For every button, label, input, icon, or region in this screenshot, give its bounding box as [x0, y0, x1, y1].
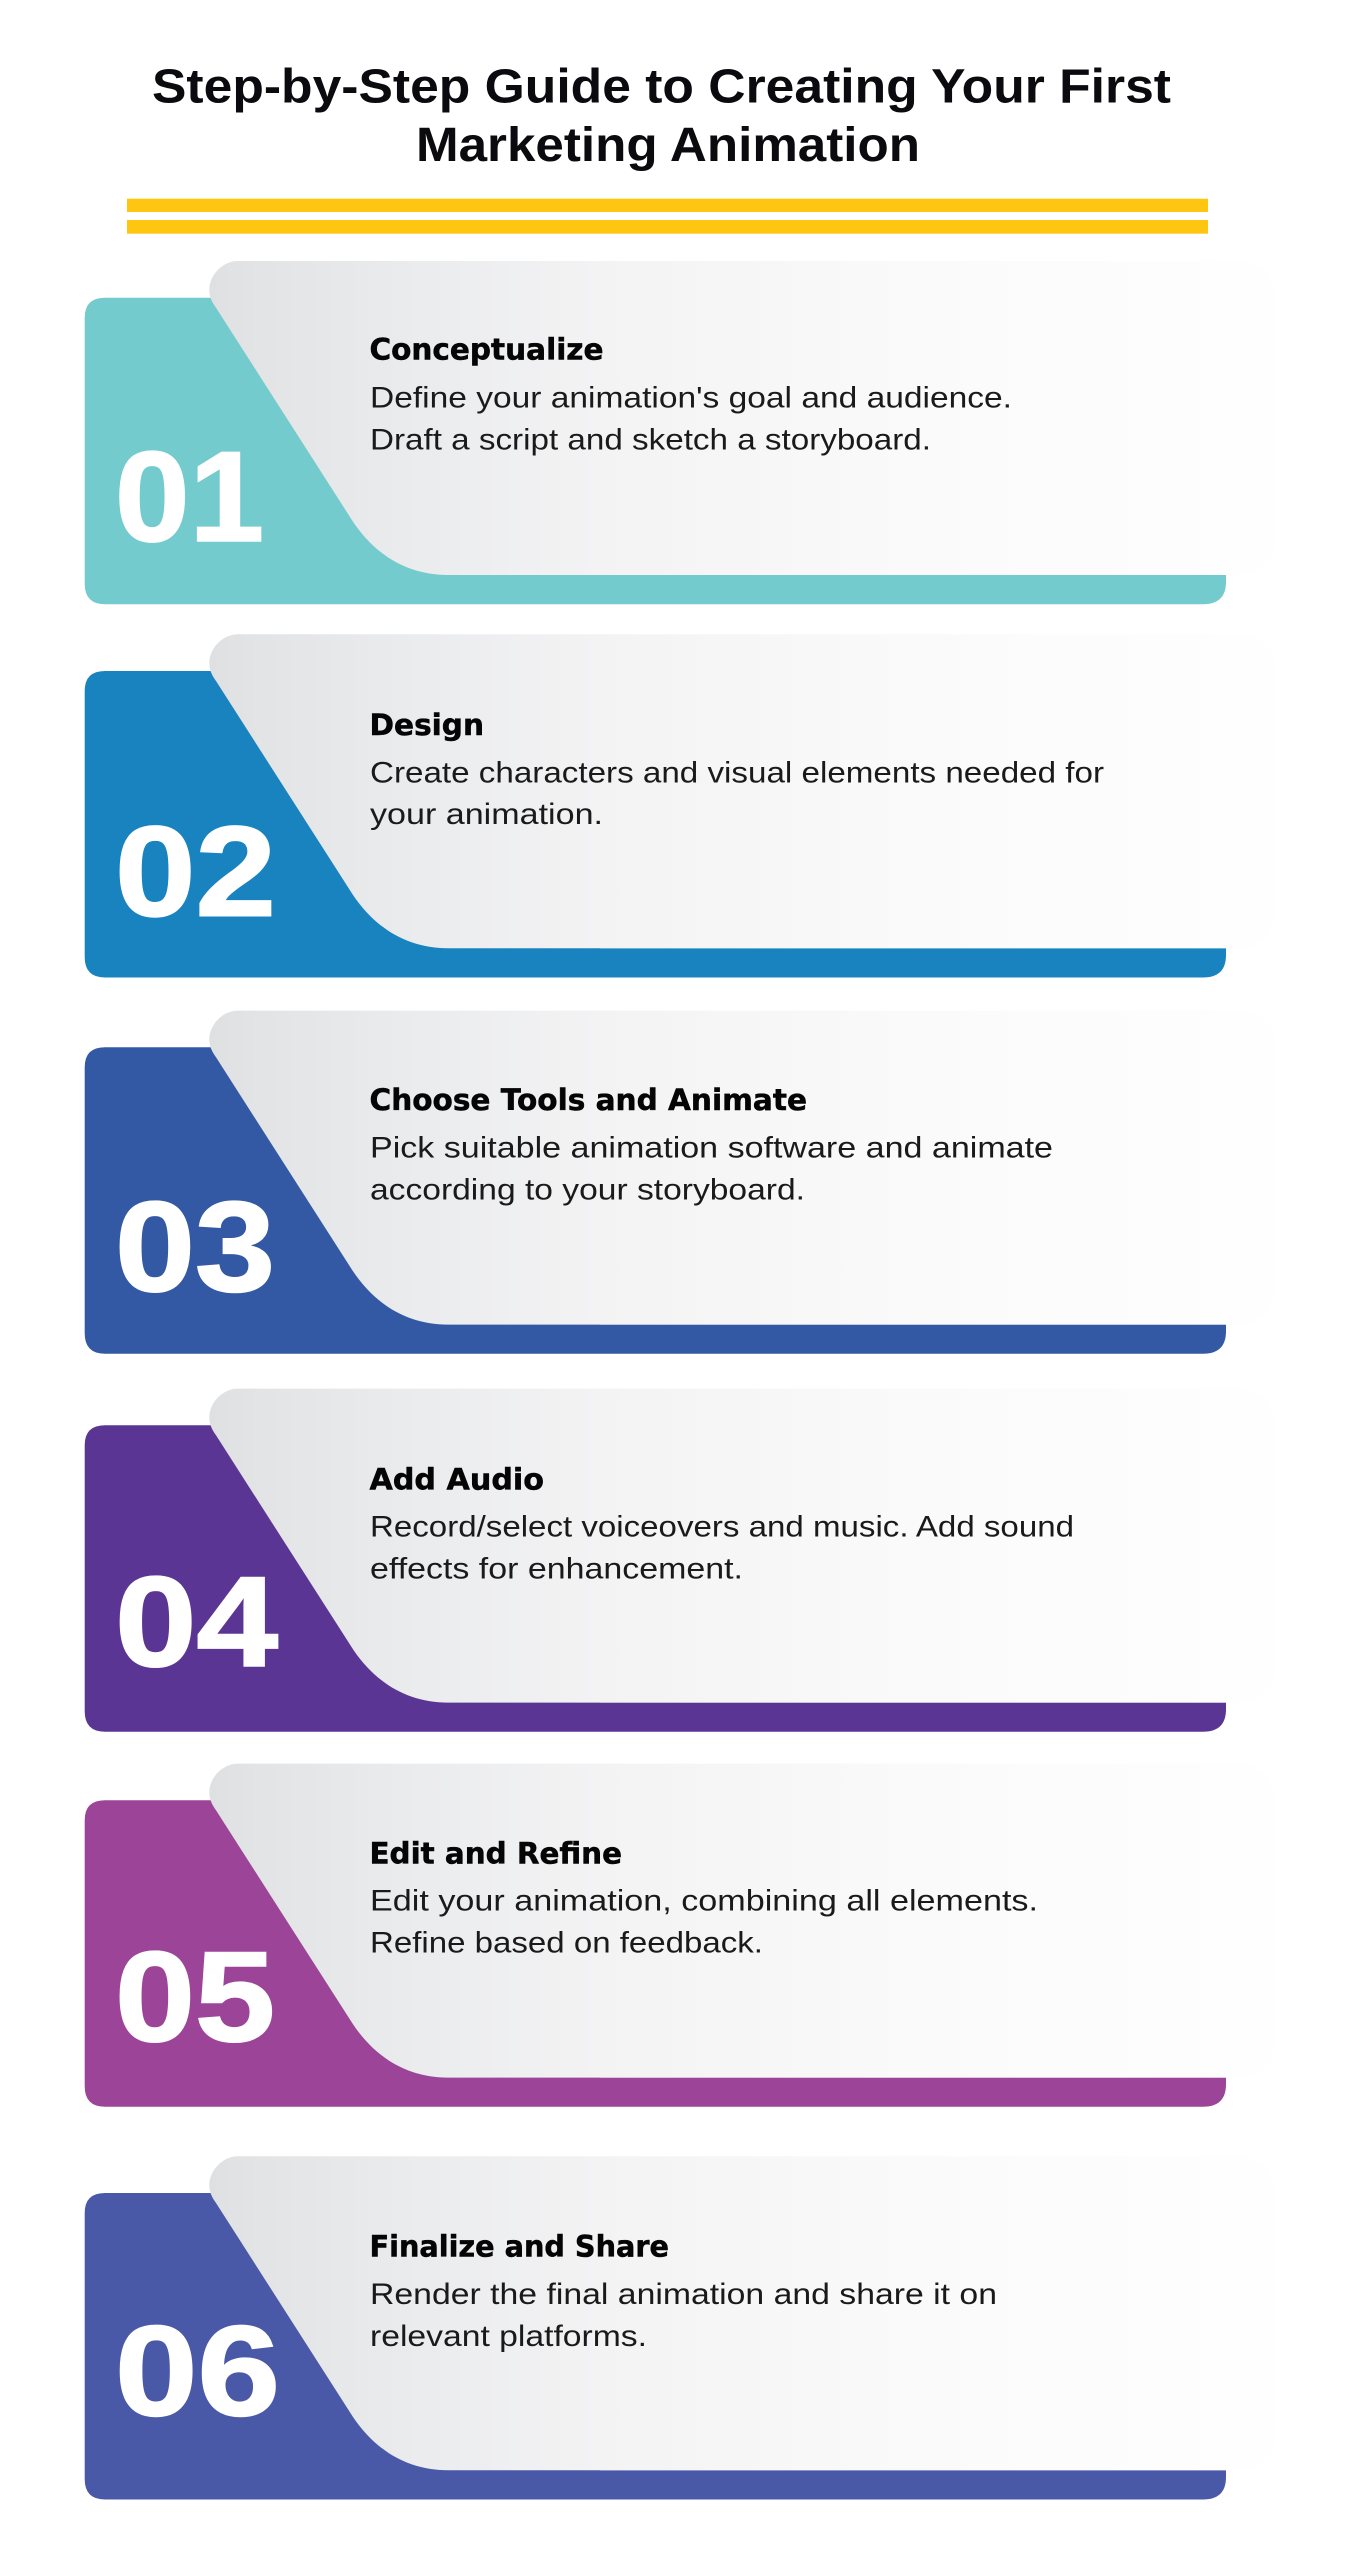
- step description: Record/select voiceovers and music. Add sound: [370, 1511, 1074, 1544]
- title: Marketing Animation: [416, 119, 920, 172]
- step heading: Add Audio: [370, 1462, 544, 1496]
- title: [152, 61, 1171, 172]
- step number: 03: [115, 1176, 275, 1319]
- colored base shape: [85, 1800, 1226, 2107]
- gradient card: [209, 2156, 1275, 2470]
- step heading: Choose Tools and Animate: [370, 1083, 807, 1117]
- step description: [370, 2278, 997, 2353]
- step number: 01: [115, 426, 264, 569]
- panel: step 02 Design: [85, 634, 1275, 978]
- step description: Pick suitable animation software and animate: [370, 1132, 1053, 1165]
- step description: Define your animation's goal and audience.: [370, 382, 1012, 415]
- step heading: Edit and Refine: [370, 1836, 622, 1870]
- step description: your animation.: [370, 798, 603, 831]
- step description: [370, 757, 1104, 831]
- step number: 06: [115, 2300, 280, 2443]
- step heading: Design: [370, 708, 484, 742]
- step heading: Conceptualize: [370, 332, 604, 366]
- colored base shape: [85, 298, 1226, 604]
- step description: [370, 1511, 1074, 1585]
- colored base shape: [85, 1425, 1226, 1732]
- panel: step 06 Finalize and Share: [85, 2156, 1275, 2500]
- step number: 04: [115, 1551, 278, 1694]
- panel: step 03 Choose Tools and Animate: [85, 1011, 1275, 1354]
- gradient card: [209, 1389, 1275, 1703]
- panel: step 01 Conceptualize: [85, 261, 1275, 604]
- colored base shape: [85, 2193, 1226, 2500]
- step description: Edit your animation, combining all elements.: [370, 1885, 1038, 1918]
- gradient card: [209, 261, 1275, 575]
- step description: [370, 1132, 1053, 1206]
- gradient card: [209, 1764, 1275, 2078]
- step heading: Finalize and Share: [370, 2230, 669, 2264]
- step description: [370, 382, 1012, 456]
- step number: 02: [115, 800, 276, 944]
- step description: Render the final animation and share it on: [370, 2278, 997, 2311]
- step number: 05: [115, 1926, 275, 2069]
- step description: [370, 1885, 1038, 1960]
- title: Step-by-Step Guide to Creating Your First: [152, 61, 1171, 114]
- step description: Create characters and visual elements needed for: [370, 757, 1104, 790]
- panel: step 04 Add Audio: [85, 1389, 1275, 1732]
- step description: effects for enhancement.: [370, 1552, 743, 1585]
- step description: according to your storyboard.: [370, 1173, 805, 1206]
- yellow double rule: [127, 199, 1208, 234]
- gradient card: [209, 634, 1275, 948]
- step description: Refine based on feedback.: [370, 1927, 763, 1960]
- panel: step 05 Edit and Refine: [85, 1764, 1275, 2107]
- colored base shape: [85, 671, 1226, 978]
- colored base shape: [85, 1047, 1226, 1354]
- step description: relevant platforms.: [370, 2320, 647, 2353]
- gradient card: [209, 1011, 1275, 1325]
- step description: Draft a script and sketch a storyboard.: [370, 423, 931, 456]
